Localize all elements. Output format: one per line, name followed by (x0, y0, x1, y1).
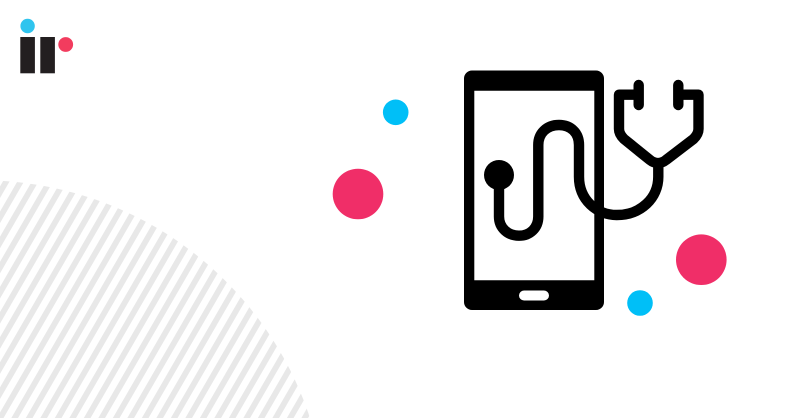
phone body (464, 70, 604, 310)
decorative dot: blue top (383, 100, 409, 125)
icon: smartphone with stethoscope (464, 70, 698, 310)
logo (20, 19, 73, 73)
earpiece yoke (619, 95, 698, 163)
striped quarter circle background (0, 181, 310, 418)
decorative dot: blue bottom (627, 290, 653, 316)
ear tips (639, 85, 678, 105)
home button (519, 290, 549, 300)
decorative dot: pink right (676, 234, 727, 285)
decorative dot: pink left (333, 169, 383, 219)
chest piece (484, 160, 514, 190)
stethoscope tube (499, 125, 658, 236)
